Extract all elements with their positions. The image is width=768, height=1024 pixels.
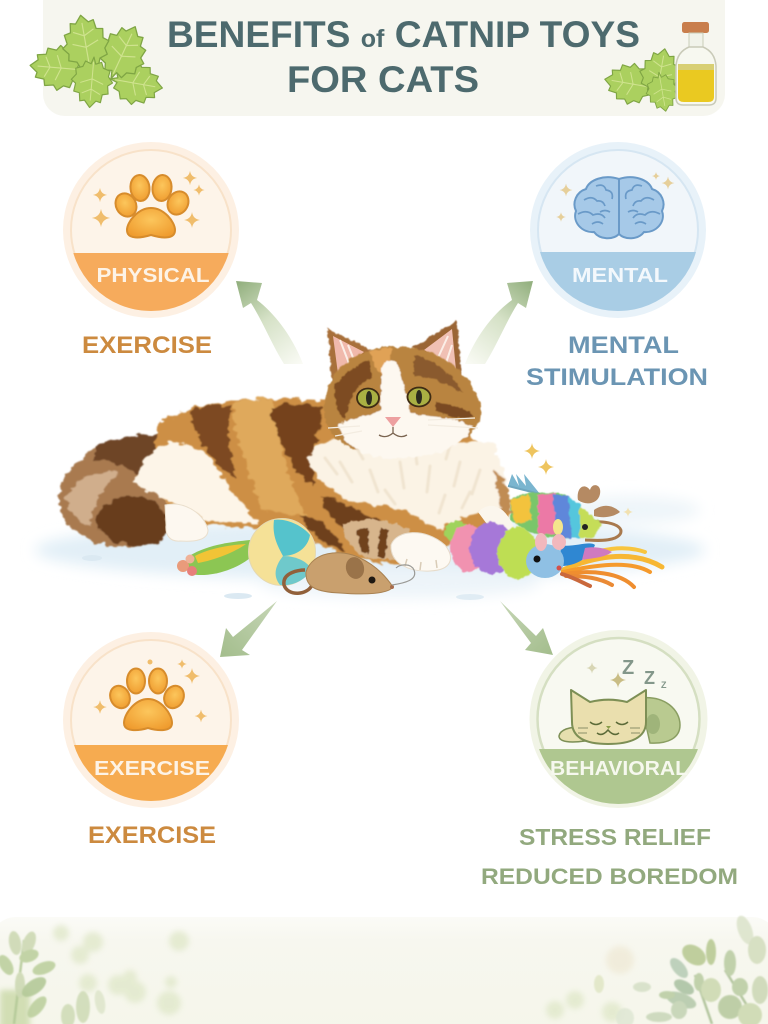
chest bbox=[307, 438, 512, 530]
icon: zzz: Z bbox=[644, 668, 655, 688]
front paw bbox=[391, 533, 450, 571]
arrow: to physical bbox=[236, 281, 303, 364]
ears bbox=[327, 320, 462, 382]
fin bbox=[508, 474, 540, 494]
body stripes bbox=[510, 492, 602, 538]
fluffy body bbox=[444, 521, 538, 579]
icon: zzz: Z bbox=[661, 680, 667, 690]
title text: FOR CATS bbox=[287, 59, 479, 100]
icon: oil bottle bbox=[676, 22, 716, 105]
icon: leaves right bbox=[601, 45, 685, 114]
tail tuft bbox=[578, 485, 621, 540]
illustration: toy ball bbox=[248, 518, 316, 586]
illustration: toy fish back right bbox=[508, 474, 621, 540]
icon: zzz bbox=[622, 657, 667, 690]
panel: physical bbox=[60, 142, 242, 323]
panel: mental bbox=[530, 142, 712, 322]
cat mat bbox=[35, 496, 705, 600]
icon: catnip leaves left bbox=[28, 11, 166, 109]
label: EXERCISE bbox=[94, 757, 210, 780]
sparkles bbox=[92, 171, 205, 228]
title text bbox=[167, 14, 640, 100]
title panel bbox=[28, 0, 725, 116]
sparkles bbox=[586, 662, 626, 688]
whiskers bbox=[328, 418, 478, 436]
nose and mouth bbox=[385, 417, 401, 427]
front leg bbox=[342, 520, 410, 560]
panel: behavioral bbox=[530, 630, 712, 819]
caption: stress relief: REDUCED BOREDOM bbox=[481, 864, 738, 889]
caption: stress relief bbox=[481, 824, 738, 889]
head bbox=[324, 347, 481, 458]
tail bbox=[59, 435, 172, 546]
chest fur strokes bbox=[325, 445, 480, 513]
icon: sleeping cat bbox=[559, 690, 680, 744]
panel: exercise bbox=[60, 632, 242, 815]
footer foliage band bbox=[0, 914, 768, 1024]
label: MENTAL bbox=[572, 264, 668, 287]
arm bbox=[478, 506, 514, 535]
head bbox=[526, 544, 564, 578]
icon: zzz: Z bbox=[622, 657, 634, 679]
feathers bbox=[560, 543, 662, 587]
caption: exercise: EXERCISE bbox=[88, 822, 216, 849]
caption: mental stimulation: STIMULATION bbox=[526, 364, 708, 391]
label: PHYSICAL bbox=[96, 264, 210, 287]
caption: mental stimulation bbox=[526, 332, 708, 391]
sparkles bbox=[93, 659, 207, 722]
icon: paw bbox=[107, 668, 187, 730]
title text: BENEFITS of CATNIP TOYS bbox=[167, 14, 640, 55]
icon: brain bbox=[574, 177, 664, 238]
caption: exercise: EXERCISE bbox=[82, 332, 212, 359]
icon: foliage bottom left bbox=[0, 930, 107, 1024]
illustration: toy mouse bbox=[284, 553, 415, 594]
belly bbox=[133, 442, 258, 523]
illustration: toy feather mouse bbox=[444, 519, 662, 587]
caption: stress relief: STRESS RELIEF bbox=[519, 824, 711, 850]
icon: paw bbox=[112, 174, 192, 237]
arrow: to behavioral bbox=[500, 601, 553, 655]
arrow: to exercise bbox=[220, 601, 277, 657]
arrow: to mental bbox=[465, 281, 533, 364]
sparkles bbox=[556, 172, 674, 222]
eyes bbox=[357, 388, 379, 408]
body bbox=[156, 399, 510, 566]
hind paw bbox=[165, 504, 208, 541]
label: BEHAVIORAL bbox=[550, 758, 688, 780]
caption: mental stimulation: MENTAL bbox=[568, 332, 679, 359]
sparkles bbox=[524, 443, 633, 517]
illustration: cat bbox=[59, 320, 514, 571]
icon: foliage bottom right bbox=[594, 914, 768, 1024]
illustration: toy stick bbox=[177, 540, 250, 576]
